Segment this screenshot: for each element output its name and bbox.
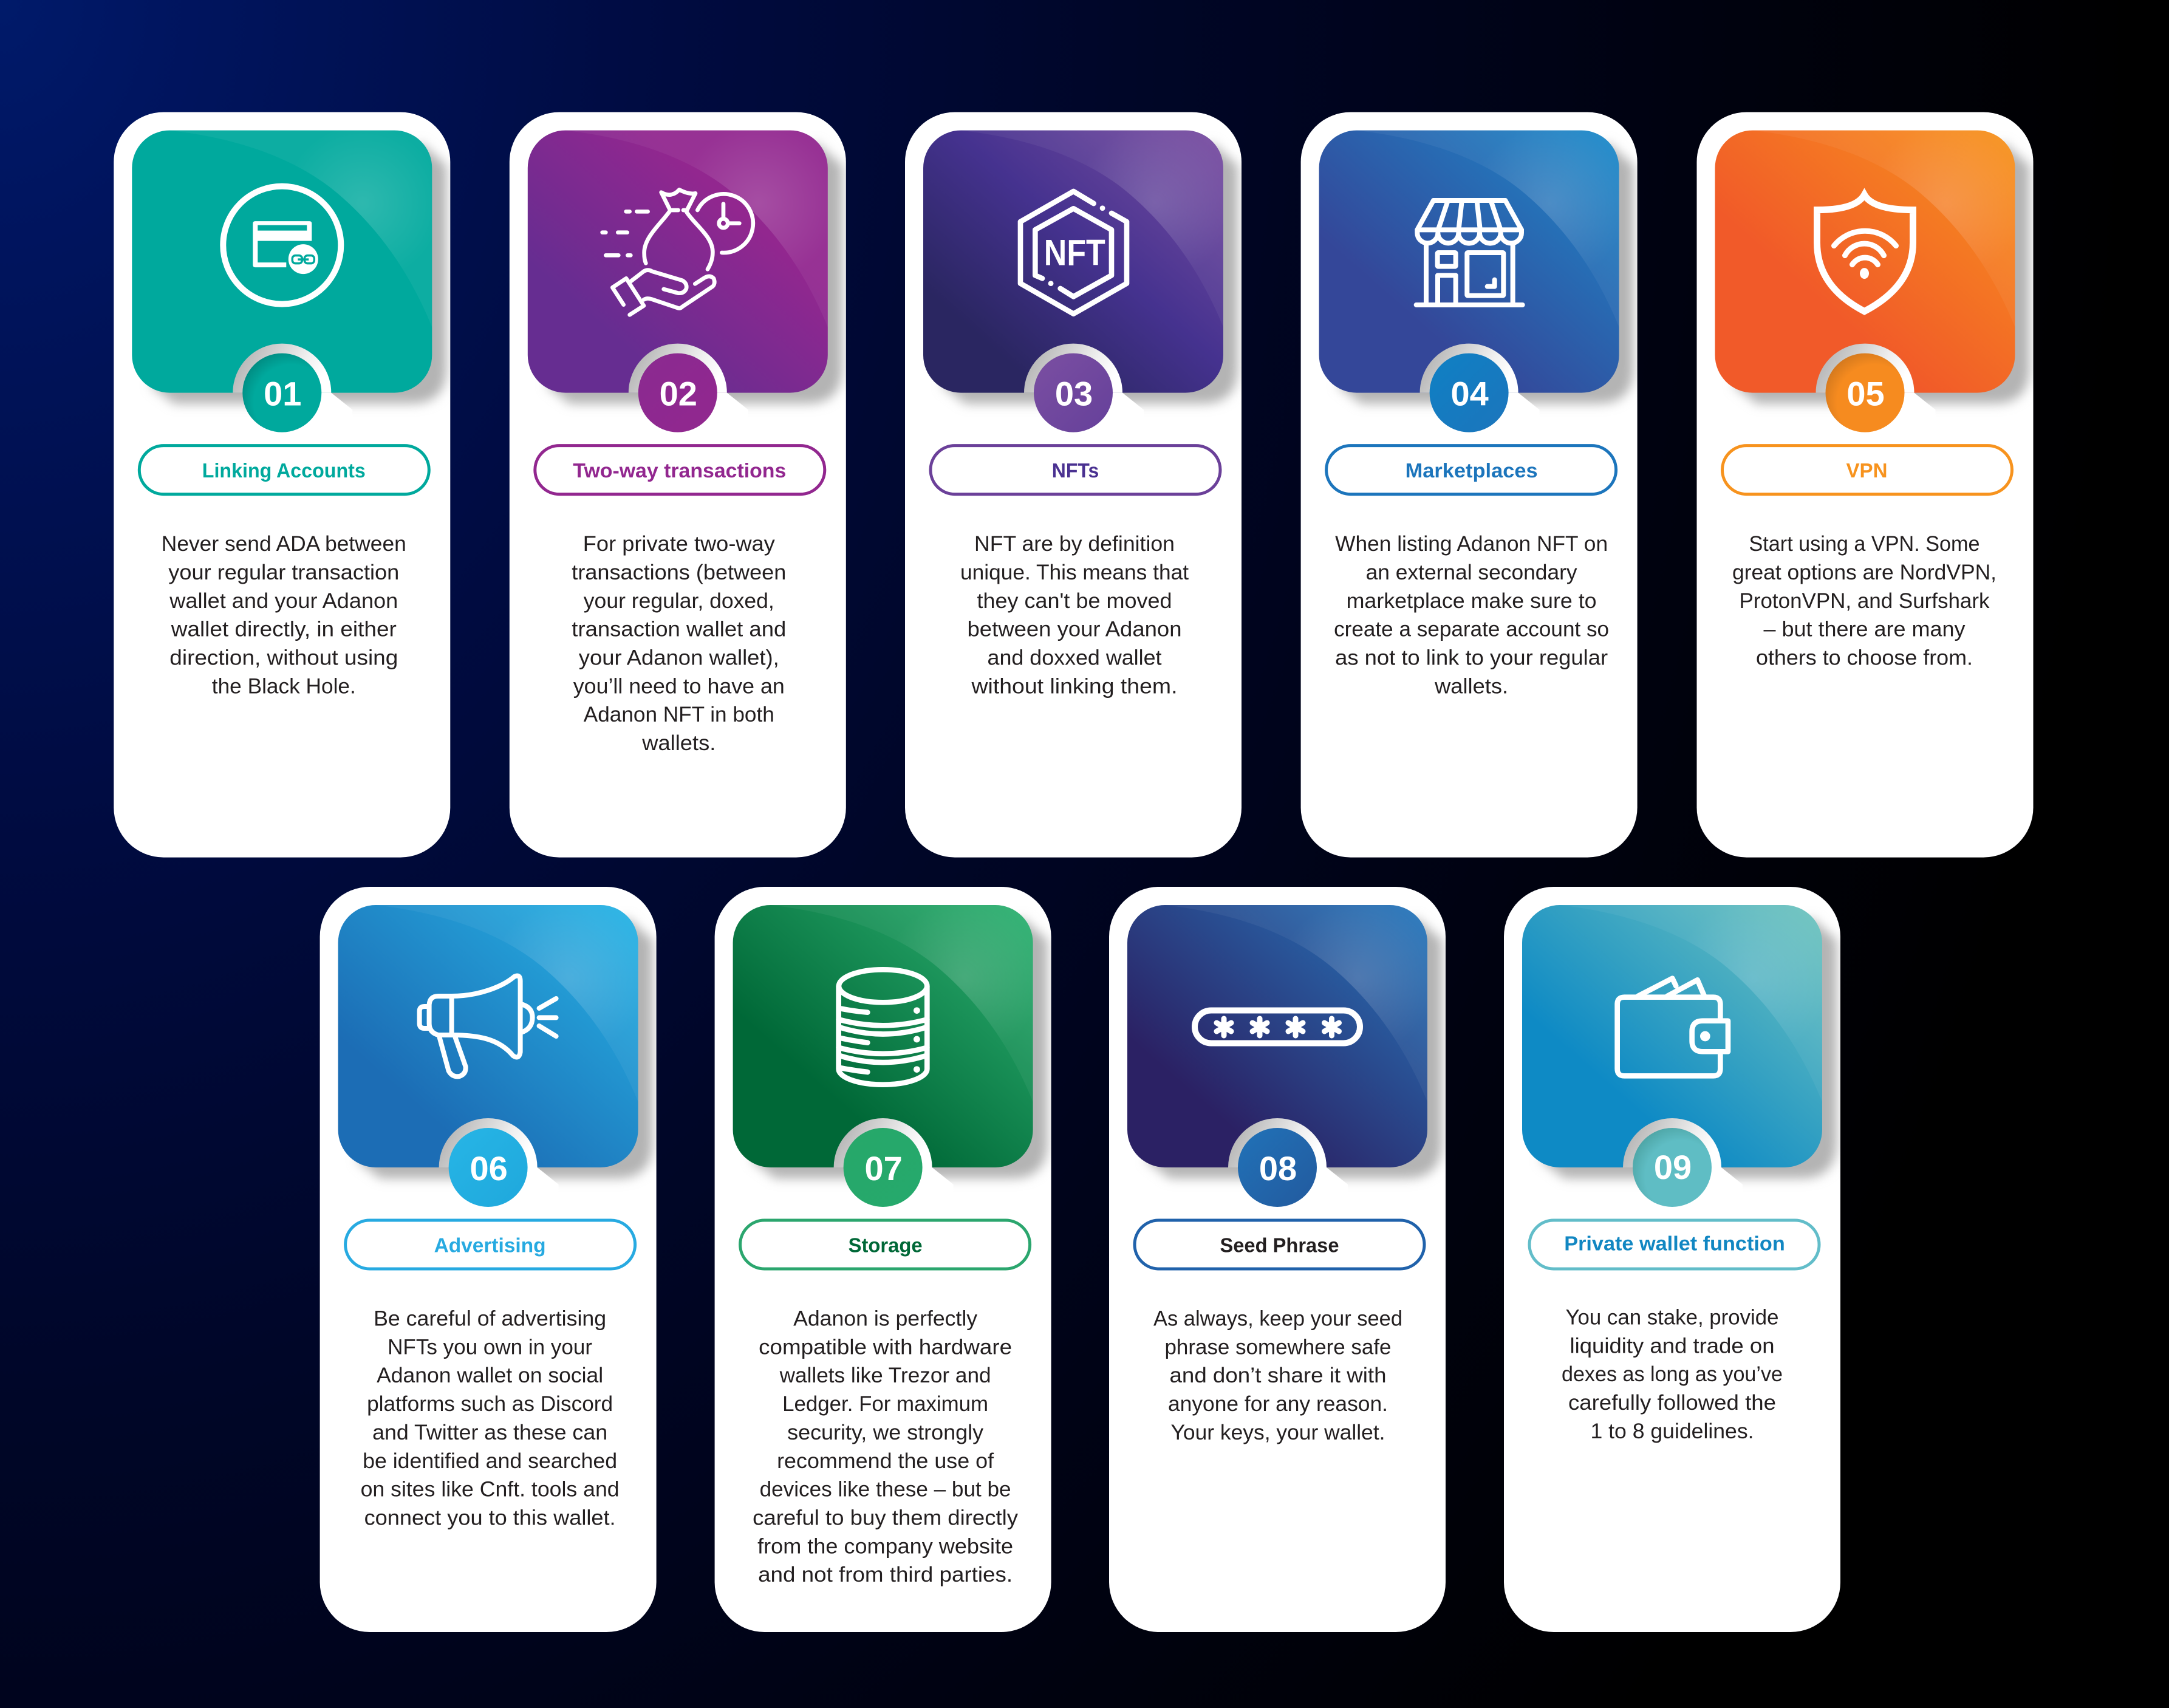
body text: create a separate account so	[1334, 618, 1609, 641]
number badge 02	[638, 354, 717, 432]
body text	[1153, 1307, 1402, 1444]
body text: platforms such as Discord	[367, 1392, 613, 1416]
number badge 03	[1034, 354, 1113, 432]
body text	[1334, 532, 1609, 698]
number badge 07	[844, 1128, 923, 1207]
icon: wallet	[1617, 979, 1728, 1076]
title pill: Linking Accounts	[139, 446, 429, 494]
number badge 01	[242, 354, 321, 432]
number badge 09	[1633, 1128, 1712, 1207]
title pill: Seed Phrase: Seed Phrase	[1220, 1234, 1339, 1257]
body text: you’ll need to have an	[573, 674, 785, 698]
body text: phrase somewhere safe	[1165, 1335, 1391, 1359]
body text	[361, 1307, 620, 1529]
body text: compatible with hardware	[759, 1335, 1012, 1359]
title pill: Seed Phrase	[1135, 1220, 1424, 1269]
card 09: Private wallet function	[1504, 887, 1840, 1632]
card background	[715, 887, 1051, 1632]
body text: Adanon wallet on social	[377, 1364, 603, 1387]
number badge 03: 03	[1055, 375, 1093, 413]
panel: teal header	[132, 131, 446, 422]
title pill: Advertising: Advertising	[434, 1234, 546, 1257]
number badge 08	[1238, 1128, 1317, 1207]
panel: orange header	[1715, 131, 2030, 422]
number badge 01: 01	[264, 375, 301, 413]
body text: wallet directly, in either	[171, 618, 397, 641]
icon: money bag on hand with clock	[603, 190, 753, 315]
body text: – but there are many	[1764, 618, 1966, 641]
panel: navy header	[1127, 905, 1442, 1197]
card 07: Storage	[715, 887, 1051, 1632]
body text: and Twitter as these can	[372, 1421, 607, 1444]
number badge 04	[1430, 354, 1509, 432]
body text: transaction wallet and	[572, 618, 786, 641]
card background	[114, 112, 450, 858]
card background	[320, 887, 657, 1632]
body text: wallets.	[641, 731, 716, 755]
body text: wallets.	[1434, 674, 1508, 698]
title pill: VPN: VPN	[1846, 459, 1888, 482]
body text: Never send ADA between	[162, 532, 406, 556]
body text	[162, 532, 406, 698]
number badge 09: 09	[1654, 1148, 1692, 1186]
body text: Adanon is perfectly	[793, 1307, 978, 1330]
icon: NFT hexagon: NFT	[1044, 233, 1105, 273]
panel: cyan header	[1522, 905, 1837, 1197]
card 05: VPN	[1697, 112, 2034, 858]
number badge 05	[1826, 354, 1905, 432]
body text	[572, 532, 786, 755]
body text: the Black Hole.	[212, 674, 356, 698]
body text: carefully followed the	[1568, 1391, 1776, 1415]
panel: purple header	[528, 131, 842, 422]
title pill: NFTs: NFTs	[1052, 459, 1099, 482]
body text: between your Adanon	[967, 618, 1182, 641]
body text: anyone for any reason.	[1168, 1392, 1388, 1416]
body text: security, we strongly	[787, 1421, 984, 1444]
body text	[753, 1307, 1019, 1587]
body text	[1732, 532, 1997, 669]
body text: As always, keep your seed	[1153, 1307, 1402, 1330]
body text: Ledger. For maximum	[782, 1392, 988, 1416]
body text: and don’t share it with	[1170, 1364, 1386, 1387]
body text: liquidity and trade on	[1570, 1334, 1775, 1358]
body text: and not from third parties.	[758, 1563, 1013, 1587]
body text: be identified and searched	[363, 1449, 617, 1473]
body text: devices like these – but be	[760, 1478, 1011, 1501]
body text: Be careful of advertising	[374, 1307, 606, 1330]
body text: great options are NordVPN,	[1732, 561, 1997, 584]
panel: sky blue header	[338, 905, 653, 1197]
body text: ProtonVPN, and Surfshark	[1740, 589, 1990, 613]
number badge 07: 07	[864, 1149, 903, 1187]
card background	[510, 112, 846, 858]
card 01: Linking Accounts	[114, 112, 450, 858]
panel: indigo header	[923, 131, 1238, 422]
number badge 08: 08	[1259, 1149, 1297, 1187]
body text: direction, without using	[169, 646, 398, 670]
title pill: Marketplaces	[1327, 446, 1616, 494]
icon: VPN shield with wifi	[1817, 195, 1913, 312]
body text: Start using a VPN. Some	[1749, 532, 1980, 556]
body text: recommend the use of	[777, 1449, 994, 1473]
icon: NFT hexagon	[1020, 191, 1127, 314]
body text: your regular, doxed,	[584, 589, 774, 613]
body text: your regular transaction	[168, 561, 399, 584]
number badge 06: 06	[470, 1149, 508, 1187]
number badge 04: 04	[1450, 375, 1489, 413]
number badge 02: 02	[660, 375, 697, 413]
body text: on sites like Cnft. tools and	[361, 1478, 620, 1501]
body text: unique. This means that	[960, 561, 1189, 584]
title pill: Private wallet function: Private wallet function	[1564, 1232, 1785, 1255]
body text: marketplace make sure to	[1347, 589, 1597, 613]
card background	[1504, 887, 1840, 1632]
card 04: Marketplaces	[1301, 112, 1638, 858]
body text: Adanon NFT in both	[584, 703, 774, 726]
body text	[1562, 1306, 1783, 1443]
body text: others to choose from.	[1756, 646, 1973, 670]
icon: megaphone	[420, 976, 556, 1076]
card background	[1109, 887, 1446, 1632]
body text: wallet and your Adanon	[169, 589, 398, 613]
title pill: NFTs	[931, 446, 1220, 494]
panel: blue header	[1319, 131, 1634, 422]
icon: storefront	[1416, 200, 1523, 305]
card 08: Seed Phrase	[1109, 887, 1446, 1632]
card background	[1301, 112, 1638, 858]
card background	[905, 112, 1242, 858]
number badge 06	[449, 1128, 528, 1207]
body text: NFT are by definition	[974, 532, 1175, 556]
icon: password field with asterisks	[1195, 1011, 1360, 1044]
title pill: Storage: Storage	[849, 1234, 923, 1257]
body text: without linking them.	[971, 674, 1178, 698]
title pill: Private wallet function	[1529, 1220, 1819, 1269]
body text: Your keys, your wallet.	[1171, 1421, 1385, 1444]
title pill: Two-way transactions	[535, 446, 825, 494]
body text: 1 to 8 guidelines.	[1590, 1419, 1754, 1443]
body text	[960, 532, 1189, 698]
title pill: Two-way transactions: Two-way transactions	[573, 459, 786, 482]
body text: transactions (between	[572, 561, 786, 584]
body text: an external secondary	[1366, 561, 1577, 584]
title pill: Advertising	[346, 1220, 635, 1269]
body text: When listing Adanon NFT on	[1335, 532, 1608, 556]
icon: credit card with chain link	[223, 186, 341, 304]
card 03: NFTs	[905, 112, 1242, 858]
title pill: Storage	[740, 1220, 1030, 1269]
body text: as not to link to your regular	[1335, 646, 1608, 670]
title pill: Linking Accounts: Linking Accounts	[202, 459, 366, 482]
body text: wallets like Trezor and	[779, 1364, 991, 1387]
body text: your Adanon wallet),	[579, 646, 779, 670]
body text: from the company website	[757, 1534, 1013, 1558]
card background	[1697, 112, 2034, 858]
number badge 05: 05	[1846, 375, 1885, 413]
icon: database server	[839, 969, 927, 1085]
card 06: Advertising	[320, 887, 657, 1632]
body text: NFTs you own in your	[388, 1335, 592, 1359]
card 02: Two-way transactions	[510, 112, 846, 858]
body text: connect you to this wallet.	[364, 1506, 616, 1529]
panel: green header	[733, 905, 1048, 1197]
title pill: VPN	[1723, 446, 2012, 494]
body text: careful to buy them directly	[753, 1506, 1019, 1529]
body text: dexes as long as you’ve	[1562, 1362, 1783, 1386]
title pill: Marketplaces: Marketplaces	[1406, 459, 1538, 482]
body text: You can stake, provide	[1566, 1306, 1778, 1329]
body text: they can't be moved	[977, 589, 1172, 613]
body text: and doxxed wallet	[988, 646, 1162, 670]
body text: For private two-way	[583, 532, 775, 556]
